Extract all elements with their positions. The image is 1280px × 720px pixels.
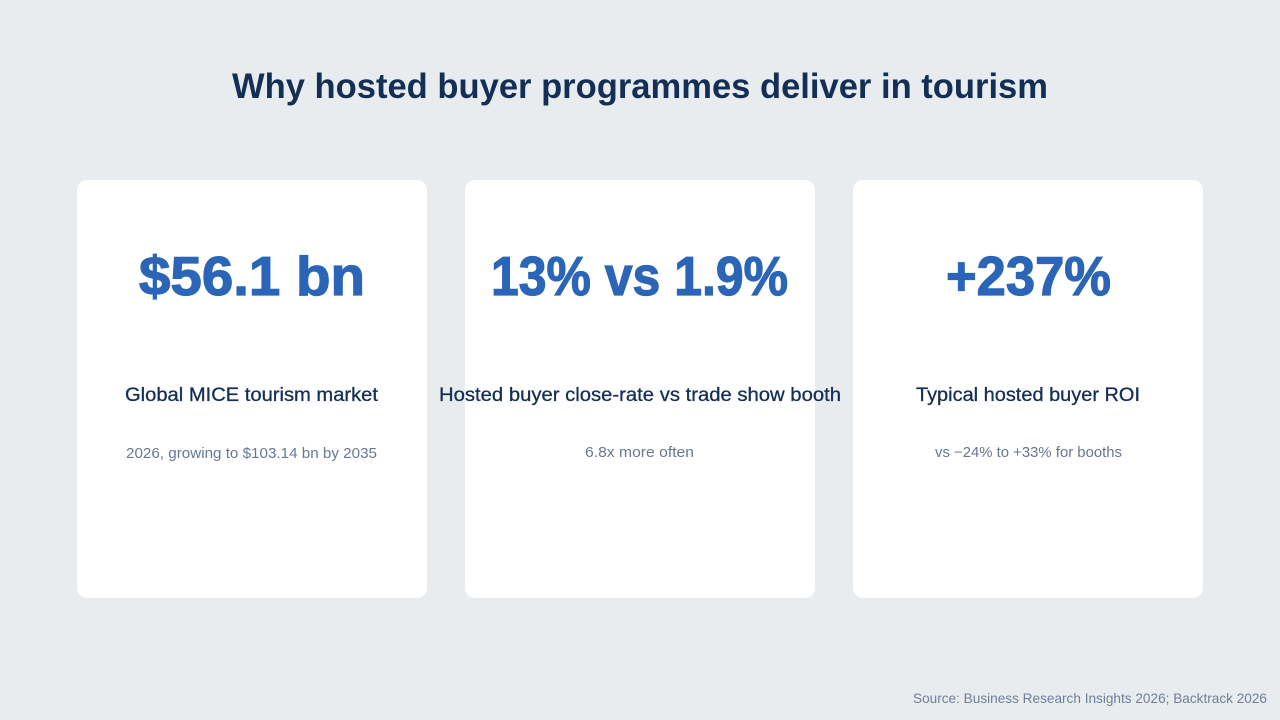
sub-text: 2026, growing to $103.14 bn by 2035 (126, 446, 377, 462)
big number: 13% vs 1.9% (491, 245, 788, 307)
panel: close rate (439, 180, 841, 598)
label: Typical hosted buyer ROI (916, 385, 1140, 406)
big number: $56.1 bn (139, 245, 365, 307)
label: Hosted buyer close-rate vs trade show booth (439, 385, 841, 406)
card background (465, 180, 815, 598)
panel: market size (77, 180, 427, 598)
sub-text: vs −24% to +33% for booths (935, 445, 1122, 461)
sub-text: 6.8x more often (585, 445, 694, 461)
panel: ROI (853, 180, 1203, 598)
card background (77, 180, 427, 598)
card background (853, 180, 1203, 598)
source note: Source: Business Research Insights 2026; Backtrack 2026 (913, 690, 1267, 706)
title: Why hosted buyer programmes deliver in tourism (232, 67, 1048, 106)
big number: +237% (946, 245, 1111, 307)
label: Global MICE tourism market (125, 385, 379, 406)
